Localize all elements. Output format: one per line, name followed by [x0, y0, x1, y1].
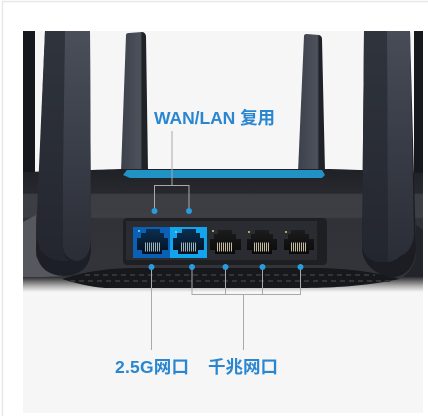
- blue light strip: [123, 170, 325, 178]
- right lower body shade: [400, 225, 423, 279]
- left front antenna: [36, 31, 91, 276]
- port 4: gigabit: [247, 230, 277, 254]
- port 3: gigabit: [210, 230, 241, 254]
- right front antenna left face: [362, 31, 388, 262]
- router illustration: [23, 31, 423, 292]
- vent slots: [70, 275, 390, 281]
- floor shadow: [23, 277, 423, 292]
- label: gigabit port: 千兆网口: [208, 357, 278, 377]
- left rear small antenna: [121, 32, 148, 172]
- port 2: light blue 2.5G: [170, 227, 207, 258]
- callout lines: gigabit: [192, 267, 300, 350]
- panel recess: [123, 218, 327, 265]
- left front antenna right face: [63, 31, 91, 261]
- far left rear antenna: [23, 31, 35, 176]
- port panel: [123, 218, 327, 265]
- right rear small antenna: [298, 34, 325, 172]
- right front antenna: [362, 31, 416, 278]
- vented base: [62, 268, 400, 288]
- callout dots: [148, 208, 304, 270]
- left front antenna left face: [36, 31, 70, 261]
- label: 2.5G port: 2.5G网口: [115, 357, 189, 377]
- router body: [23, 169, 423, 284]
- far right rear antenna: [414, 31, 423, 176]
- right front antenna right face: [387, 31, 414, 262]
- port 5: gigabit: [284, 230, 314, 254]
- left lower body highlight: [23, 215, 65, 278]
- label: WAN/LAN: WAN/LAN 复用: [154, 108, 275, 128]
- callout lines: 2.5G: [150, 267, 152, 350]
- port 1: blue 2.5G: [133, 227, 170, 258]
- callout lines: WAN/LAN: [154, 131, 189, 211]
